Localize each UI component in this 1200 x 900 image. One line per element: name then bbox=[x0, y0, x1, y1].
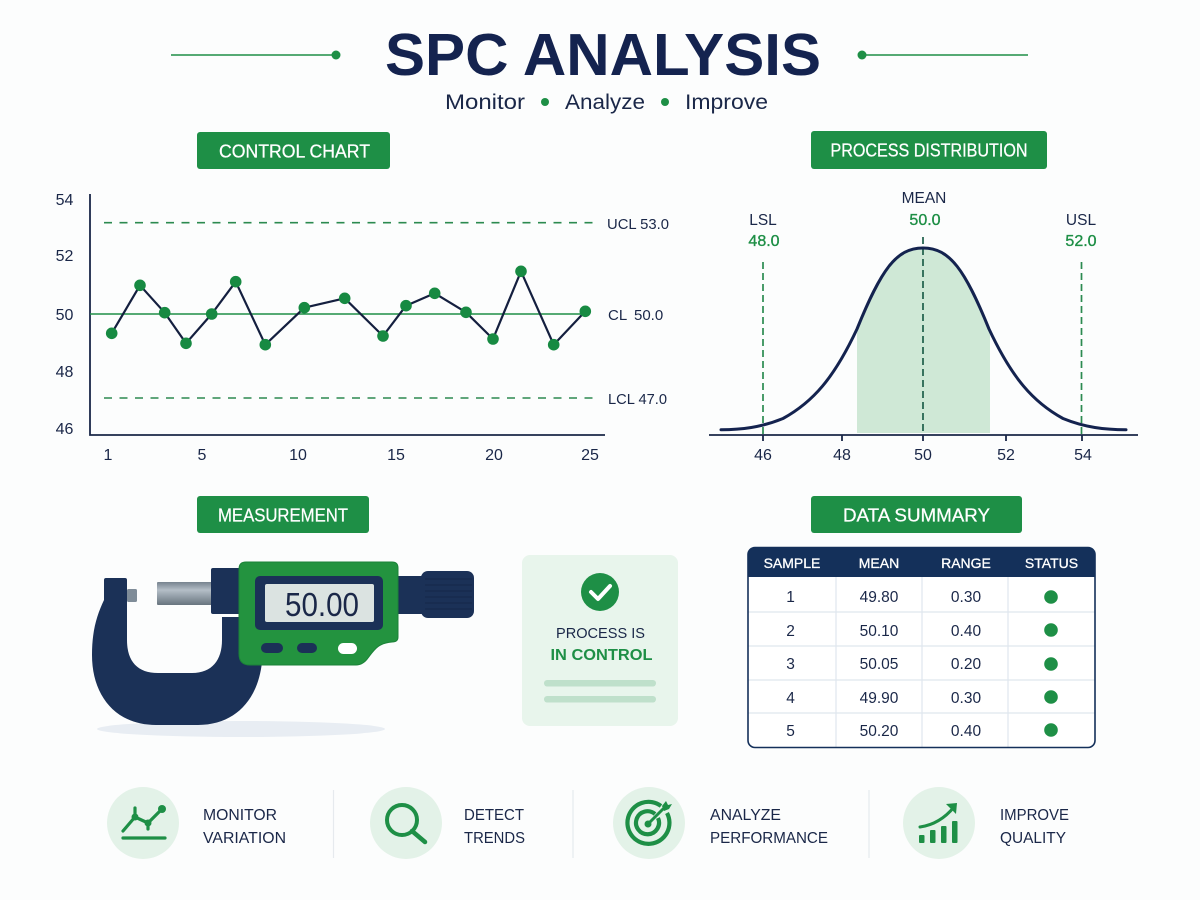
icon: growth bars bbox=[903, 787, 975, 859]
heading: control chart bbox=[197, 132, 390, 169]
x axis labels: 15 bbox=[387, 447, 405, 464]
feature: detect trends bbox=[370, 787, 525, 859]
limit labels: LCL 47.0 bbox=[608, 391, 667, 408]
table rows bbox=[786, 589, 981, 740]
spindle bbox=[157, 582, 212, 605]
label bbox=[1000, 807, 1069, 847]
table header: STATUS bbox=[1025, 555, 1078, 571]
y axis labels: 54 bbox=[56, 192, 74, 209]
table rows: 4 bbox=[786, 690, 795, 707]
label bbox=[203, 807, 286, 847]
USL label: 52.0 bbox=[1065, 233, 1097, 250]
placeholder bars bbox=[544, 680, 656, 702]
heading: data summary: DATA SUMMARY bbox=[843, 506, 990, 526]
icon: check bbox=[581, 573, 619, 611]
x axis labels: 20 bbox=[485, 447, 503, 464]
table rows: 5 bbox=[786, 723, 795, 740]
data points bbox=[106, 266, 591, 351]
icon: micrometer bbox=[92, 562, 474, 737]
table rows: 0.30 bbox=[951, 589, 981, 606]
title: SPC ANALYSIS bbox=[385, 22, 821, 88]
LSL label bbox=[748, 212, 780, 250]
x axis labels: 50 bbox=[914, 447, 932, 464]
limit labels: UCL 53.0 bbox=[607, 216, 669, 233]
USL label bbox=[1065, 212, 1097, 250]
heading: data summary bbox=[811, 496, 1022, 533]
x axis labels: 48 bbox=[833, 447, 851, 464]
table header: MEAN bbox=[859, 555, 899, 571]
LCD screen bbox=[265, 584, 374, 622]
y axis labels: 48 bbox=[56, 364, 74, 381]
label bbox=[710, 807, 828, 847]
knob bbox=[421, 571, 474, 618]
status dots bbox=[1044, 590, 1058, 737]
x axis labels: 54 bbox=[1074, 447, 1092, 464]
panel: control chart bbox=[56, 192, 669, 464]
specification lines bbox=[763, 237, 1082, 435]
table rows: 50.05 bbox=[860, 656, 898, 673]
table header: SAMPLE bbox=[764, 555, 820, 571]
panel: status card bbox=[522, 555, 678, 726]
green body bbox=[239, 562, 398, 665]
y axis labels: 46 bbox=[56, 421, 74, 438]
anvil bbox=[127, 589, 137, 602]
title right rule bbox=[858, 50, 1028, 60]
bell curve bbox=[721, 248, 1126, 430]
y axis labels: 52 bbox=[56, 248, 74, 265]
status text: PROCESS IS bbox=[556, 625, 645, 642]
panel: process distribution bbox=[709, 190, 1138, 464]
table rows: 49.80 bbox=[860, 589, 899, 606]
heading: measurement: MEASUREMENT bbox=[218, 506, 348, 526]
label: DETECT bbox=[464, 807, 524, 824]
table rows: 49.90 bbox=[860, 690, 899, 707]
lower control limit line bbox=[104, 397, 595, 399]
LSL label: 48.0 bbox=[748, 233, 780, 250]
buttons bbox=[261, 643, 357, 654]
label: ANALYZE bbox=[710, 807, 781, 824]
x axis labels bbox=[104, 447, 599, 464]
table header: RANGE bbox=[941, 555, 991, 571]
limit labels: 50.0 bbox=[634, 307, 663, 324]
mean label bbox=[902, 190, 946, 229]
shadow bbox=[97, 721, 385, 737]
heading: control chart: CONTROL CHART bbox=[219, 142, 370, 162]
table rows: 1 bbox=[786, 589, 795, 606]
x axis labels: 25 bbox=[581, 447, 599, 464]
table rows: 50.10 bbox=[860, 623, 899, 640]
x axis labels: 1 bbox=[104, 447, 113, 464]
chart axes bbox=[90, 194, 605, 435]
center line bbox=[90, 313, 585, 315]
table header bbox=[748, 548, 1095, 577]
x axis labels: 10 bbox=[289, 447, 307, 464]
heading: process distribution: PROCESS DISTRIBUTION bbox=[830, 140, 1028, 160]
icon: line chart bbox=[107, 787, 179, 859]
neck bbox=[396, 576, 424, 614]
limit labels bbox=[607, 216, 669, 408]
mean label: 50.0 bbox=[909, 212, 941, 229]
upper control limit line bbox=[104, 222, 595, 224]
x axis labels: 52 bbox=[997, 447, 1015, 464]
label: IMPROVE bbox=[1000, 807, 1069, 824]
feature: monitor variation bbox=[107, 787, 286, 859]
USL label: USL bbox=[1066, 212, 1096, 229]
panel: data table bbox=[748, 548, 1095, 748]
display bezel bbox=[255, 576, 383, 630]
label: VARIATION bbox=[203, 830, 286, 847]
heading: process distribution bbox=[811, 131, 1047, 169]
label bbox=[464, 807, 525, 847]
table rows: 0.40 bbox=[951, 623, 981, 640]
feature: analyze performance bbox=[613, 787, 828, 859]
icon: target bbox=[613, 787, 685, 859]
baseline axis bbox=[709, 435, 1138, 441]
y axis labels: 50 bbox=[56, 307, 74, 324]
frame bbox=[92, 578, 262, 725]
feature: improve quality bbox=[903, 787, 1069, 859]
label: TRENDS bbox=[464, 830, 525, 847]
label: MONITOR bbox=[203, 807, 277, 824]
y axis labels bbox=[56, 192, 74, 438]
table rows: 2 bbox=[786, 623, 795, 640]
table rows: 0.20 bbox=[951, 656, 981, 673]
subtitle bbox=[445, 91, 768, 114]
shaded area bbox=[857, 248, 990, 433]
heading: measurement bbox=[197, 496, 369, 533]
icon: magnifier bbox=[370, 787, 442, 859]
collar bbox=[211, 568, 241, 614]
table rows: 50.20 bbox=[860, 723, 899, 740]
x axis labels: 5 bbox=[198, 447, 207, 464]
mean label: MEAN bbox=[902, 190, 946, 207]
table rows: 0.30 bbox=[951, 690, 981, 707]
status text: IN CONTROL bbox=[550, 647, 653, 664]
title left rule bbox=[171, 50, 340, 60]
table rows: 3 bbox=[786, 656, 795, 673]
subtitle: Monitor bbox=[445, 91, 525, 114]
x axis labels bbox=[754, 447, 1092, 464]
label: QUALITY bbox=[1000, 830, 1066, 847]
subtitle: Analyze bbox=[565, 91, 645, 114]
subtitle: Improve bbox=[685, 91, 768, 114]
data line bbox=[112, 271, 585, 345]
limit labels: CL bbox=[608, 307, 627, 324]
table rows: 0.40 bbox=[951, 723, 981, 740]
LCD reading: 50.00 bbox=[285, 586, 359, 623]
LSL label: LSL bbox=[749, 212, 777, 229]
x axis labels: 46 bbox=[754, 447, 772, 464]
status text bbox=[550, 625, 653, 664]
label: PERFORMANCE bbox=[710, 830, 828, 847]
